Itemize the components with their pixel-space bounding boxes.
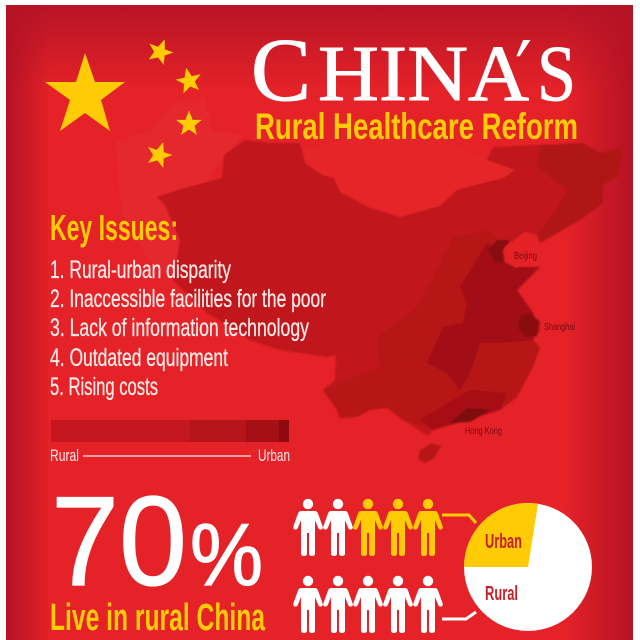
people row: urban bbox=[293, 499, 443, 556]
map: coastal dark band bbox=[427, 243, 540, 390]
map: Bohai sea bbox=[503, 232, 537, 268]
caption: live in rural China: Live in rural China bbox=[50, 597, 266, 639]
icon: small star 3 bbox=[176, 110, 202, 135]
people row: rural bbox=[293, 576, 443, 633]
big statistic 70%: % bbox=[190, 505, 263, 604]
title: ' bbox=[490, 26, 540, 98]
connector: urban bbox=[442, 515, 476, 523]
map: Hainan island bbox=[418, 443, 441, 463]
icon: small star 1 bbox=[144, 35, 177, 67]
map: Shanghai dark area bbox=[518, 313, 540, 337]
legend label: Rural: Rural bbox=[50, 446, 79, 465]
legend label: Urban: Urban bbox=[258, 446, 290, 465]
big statistic 70%: 70 bbox=[51, 470, 187, 612]
connector: rural bbox=[442, 612, 476, 619]
key issues heading: Key Issues: bbox=[50, 207, 178, 248]
key issues list: 2. Inaccessible facilities for the poor bbox=[50, 285, 326, 313]
map: Beijing dark area bbox=[488, 240, 510, 263]
flag stars bbox=[45, 35, 204, 169]
map: light Mongolia region bbox=[303, 130, 515, 217]
map: north-east band bbox=[537, 143, 623, 243]
pie chart bbox=[464, 503, 592, 631]
key issues list: 1. Rural-urban disparity bbox=[50, 256, 231, 284]
key issues list: 4. Outdated equipment bbox=[50, 344, 228, 372]
map label: Beijing: Beijing bbox=[514, 251, 537, 262]
map: Hong Kong dark area bbox=[450, 408, 490, 423]
title: S bbox=[537, 31, 576, 118]
icon: large star bbox=[45, 53, 125, 131]
map of China bbox=[116, 96, 623, 463]
map label: Shanghai: Shanghai bbox=[544, 322, 575, 333]
pie label: Rural: Rural bbox=[485, 583, 518, 605]
key issues list: 5. Rising costs bbox=[50, 373, 158, 401]
density legend bar bbox=[50, 420, 290, 465]
icon: small star 2 bbox=[174, 65, 204, 94]
key issues list bbox=[50, 256, 326, 401]
title: HINA bbox=[318, 31, 529, 118]
title: C bbox=[251, 21, 311, 120]
title bbox=[251, 21, 576, 120]
map: light western region bbox=[116, 96, 245, 280]
pie label: Urban: Urban bbox=[485, 531, 522, 553]
key issues list: 3. Lack of information technology bbox=[50, 314, 309, 342]
map: central band bbox=[323, 230, 540, 430]
map: dark mainland bbox=[157, 140, 623, 436]
big statistic 70% bbox=[51, 470, 263, 612]
icon: small star 4 bbox=[143, 138, 175, 169]
map: Guangdong band bbox=[420, 390, 507, 430]
map label: Hong Kong: Hong Kong bbox=[465, 426, 502, 437]
